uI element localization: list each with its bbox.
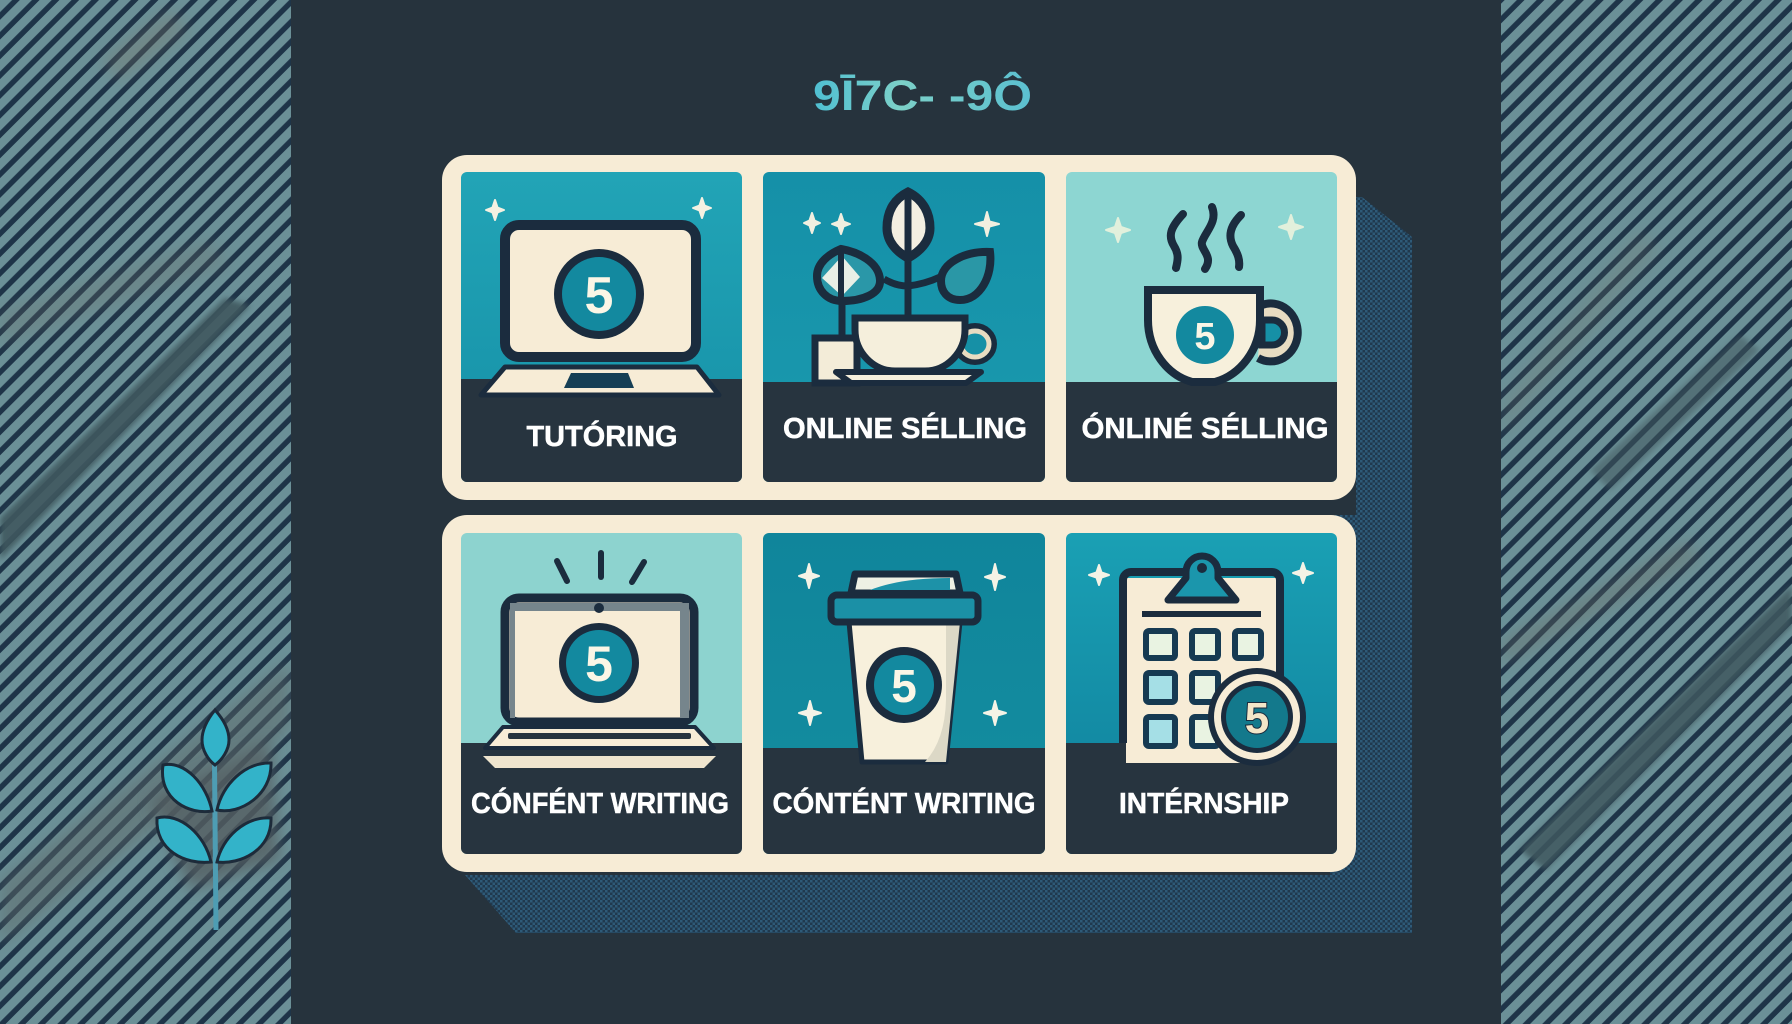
panel: tutoring — [461, 172, 742, 482]
dotted drop shadow behind panels — [465, 197, 1412, 933]
panel: content writing with takeaway cup — [763, 533, 1045, 854]
icon: laptop with number 5 — [481, 225, 719, 395]
icon: number 5 badge: 5 — [1245, 694, 1269, 743]
icon: mug with number 5: 5 — [1194, 316, 1216, 358]
left striped side panel — [0, 0, 291, 1024]
panel: bottom row frame — [442, 515, 1356, 872]
icon: calendar clipboard — [1123, 556, 1280, 763]
panel: online selling with plant and cup — [763, 172, 1045, 482]
icon: takeaway cup with number 5 — [831, 574, 978, 762]
icon: attention rays — [557, 553, 644, 582]
icon: mug with number 5 — [1148, 290, 1298, 382]
icon: laptop with number 5 — [483, 598, 716, 768]
panel: content writing with laptop — [461, 533, 742, 854]
panel: online selling with steaming mug — [1066, 172, 1337, 482]
right striped side panel — [1501, 0, 1792, 1024]
icon: sparkles — [804, 212, 999, 236]
icon: laptop with number 5: 5 — [585, 267, 613, 325]
icon: coffee cup on saucer — [815, 318, 993, 383]
icon: sparkles — [1089, 563, 1313, 585]
icon: sparkles — [799, 564, 1006, 725]
icon: laptop with number 5: 5 — [585, 636, 613, 692]
icon: teal leaf sprig — [157, 710, 271, 930]
calendar grid — [1146, 631, 1261, 746]
label: ONLINE SÉLLING — [783, 411, 1027, 445]
label: ÓNLINÉ SÉLLING — [1082, 411, 1328, 445]
panel: internship — [1066, 533, 1337, 854]
icon: sparkles — [1106, 215, 1303, 242]
label: CÓNTÉNT WRITING — [772, 786, 1036, 820]
title: 9Ī7C- -9Ô — [813, 71, 1032, 120]
label: CÓNFÉNT WRITING — [471, 786, 729, 820]
icon: sparkles — [486, 198, 711, 220]
panel: top row frame — [442, 155, 1356, 500]
icon: steam — [1171, 207, 1241, 269]
icon: potted plant — [817, 192, 990, 340]
icon: takeaway cup with number 5: 5 — [891, 660, 917, 712]
icon: number 5 badge — [1208, 668, 1306, 766]
label: TUTÓRING — [526, 419, 678, 453]
label: INTÉRNSHIP — [1119, 786, 1289, 820]
